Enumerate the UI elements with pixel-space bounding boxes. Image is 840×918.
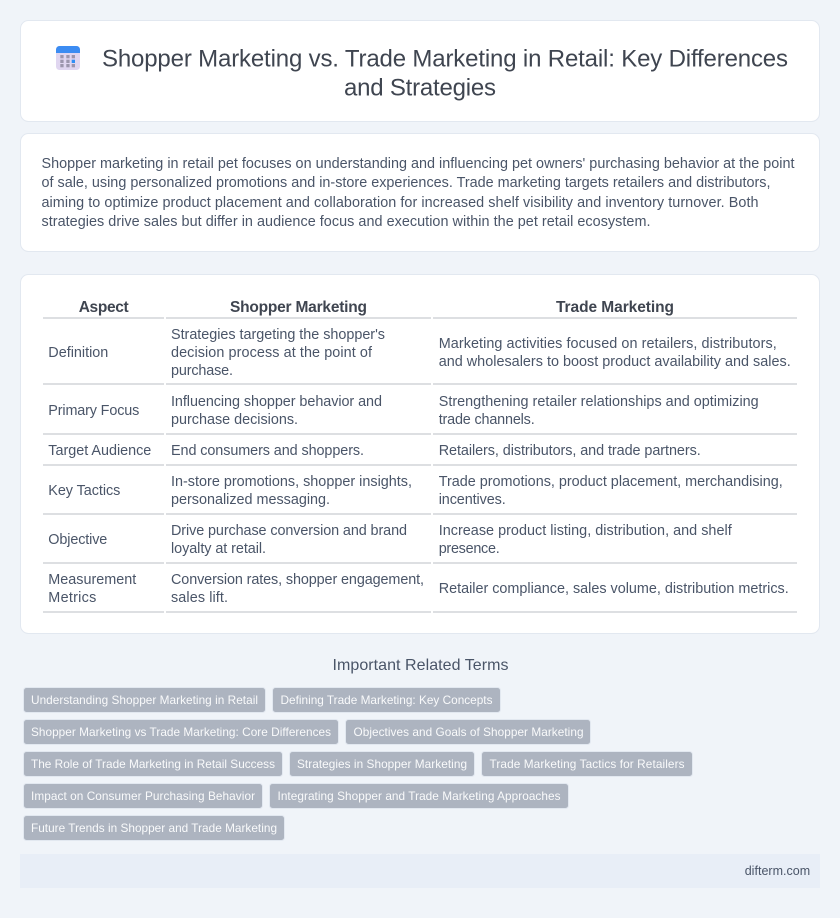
related terms tags (24, 688, 692, 840)
tag: Understanding Shopper Marketing in Retail (31, 693, 258, 707)
table header row: Aspect (79, 299, 129, 316)
footer site name: difterm.com (745, 864, 810, 878)
row: key tactics: Trade promotions, product placement, merchandising, (439, 474, 783, 490)
row: definition: purchase. (171, 363, 233, 379)
tag: Impact on Consumer Purchasing Behavior (31, 789, 255, 803)
row: objective: loyalty at retail. (171, 541, 266, 557)
intro text: Shopper marketing in retail pet focuses on understanding and influencing pet owners' purchasing behavior at the point (42, 156, 794, 172)
tag (24, 784, 262, 808)
row: definition: Strategies targeting the shopper's (171, 327, 385, 343)
row: target audience (48, 443, 701, 459)
row: objective: Increase product listing, distribution, and shelf (439, 523, 733, 539)
tag (270, 784, 568, 808)
intro text: of sale, using personalized promotions and in-store experiences. Trade marketing targets retailers and distributors, (42, 175, 770, 191)
tag: Objectives and Goals of Shopper Marketing (354, 725, 584, 739)
row: key tactics: incentives. (439, 492, 506, 508)
tag (346, 720, 590, 744)
row: definition: Marketing activities focused on retailers, distributors, (439, 336, 777, 352)
row: key tactics (48, 474, 783, 508)
row: objective: presence. (439, 541, 500, 557)
tag (24, 752, 282, 776)
row: key tactics: personalized messaging. (171, 492, 330, 508)
row: definition: and wholesalers to boost product availability and sales. (439, 354, 791, 370)
tag: Future Trends in Shopper and Trade Marketing (31, 821, 277, 835)
row: key tactics: Key Tactics (48, 483, 120, 499)
tag (290, 752, 474, 776)
row: measurement metrics (48, 572, 789, 606)
panel: comparison table (20, 274, 820, 634)
title (102, 46, 788, 102)
row: definition: Definition (48, 345, 108, 361)
tag: The Role of Trade Marketing in Retail Success (31, 757, 275, 771)
row: definition: decision process at the point of (171, 345, 373, 361)
row: measurement metrics: Conversion rates, shopper engagement, (171, 572, 424, 588)
tag: Strategies in Shopper Marketing (297, 757, 467, 771)
row: primary focus (48, 394, 759, 428)
panel: title header (20, 20, 820, 122)
tag: Trade Marketing Tactics for Retailers (490, 757, 685, 771)
row: measurement metrics: Retailer compliance, sales volume, distribution metrics. (439, 581, 789, 597)
tag: Defining Trade Marketing: Key Concepts (280, 693, 493, 707)
row: definition (48, 327, 791, 379)
tag (482, 752, 692, 776)
row: objective (48, 523, 733, 557)
row: primary focus: Influencing shopper behavior and (171, 394, 382, 410)
tag (24, 688, 266, 712)
icon: calendar (56, 46, 80, 70)
row: measurement metrics: sales lift. (171, 590, 228, 606)
heading: important related terms: Important Related Terms (332, 657, 508, 674)
row: target audience: Retailers, distributors, and trade partners. (439, 443, 701, 459)
panel: introduction paragraph (20, 134, 820, 252)
row: measurement metrics: Measurement (48, 572, 136, 588)
table header row: Trade Marketing (556, 299, 674, 316)
title: Shopper Marketing vs. Trade Marketing in Retail: Key Differences (102, 46, 788, 72)
row: objective: Drive purchase conversion and brand (171, 523, 407, 539)
row: target audience: End consumers and shoppers. (171, 443, 364, 459)
table header row (79, 299, 674, 316)
title: and Strategies (344, 74, 496, 102)
row: measurement metrics: Metrics (48, 590, 96, 606)
table header row: Shopper Marketing (230, 299, 367, 316)
row: primary focus: purchase decisions. (171, 412, 298, 428)
tag (24, 720, 338, 744)
intro text (42, 156, 794, 230)
intro text: aiming to optimize product placement and collaboration for increased shelf visibility and inventory turnover. Both (42, 195, 758, 211)
row: objective: Objective (48, 532, 107, 548)
tag: Shopper Marketing vs Trade Marketing: Core Differences (31, 725, 331, 739)
tag: Integrating Shopper and Trade Marketing Approaches (278, 789, 561, 803)
row: target audience: Target Audience (48, 443, 151, 459)
row: primary focus: trade channels. (439, 412, 535, 428)
row: key tactics: In-store promotions, shopper insights, (171, 474, 412, 490)
footer bar (20, 854, 820, 888)
row: primary focus: Strengthening retailer relationships and optimizing (439, 394, 759, 410)
row: primary focus: Primary Focus (48, 403, 139, 419)
tag (24, 816, 284, 840)
intro text: strategies drive sales but differ in audience focus and execution within the pet retail ecosystem. (42, 214, 650, 230)
tag (272, 688, 500, 712)
